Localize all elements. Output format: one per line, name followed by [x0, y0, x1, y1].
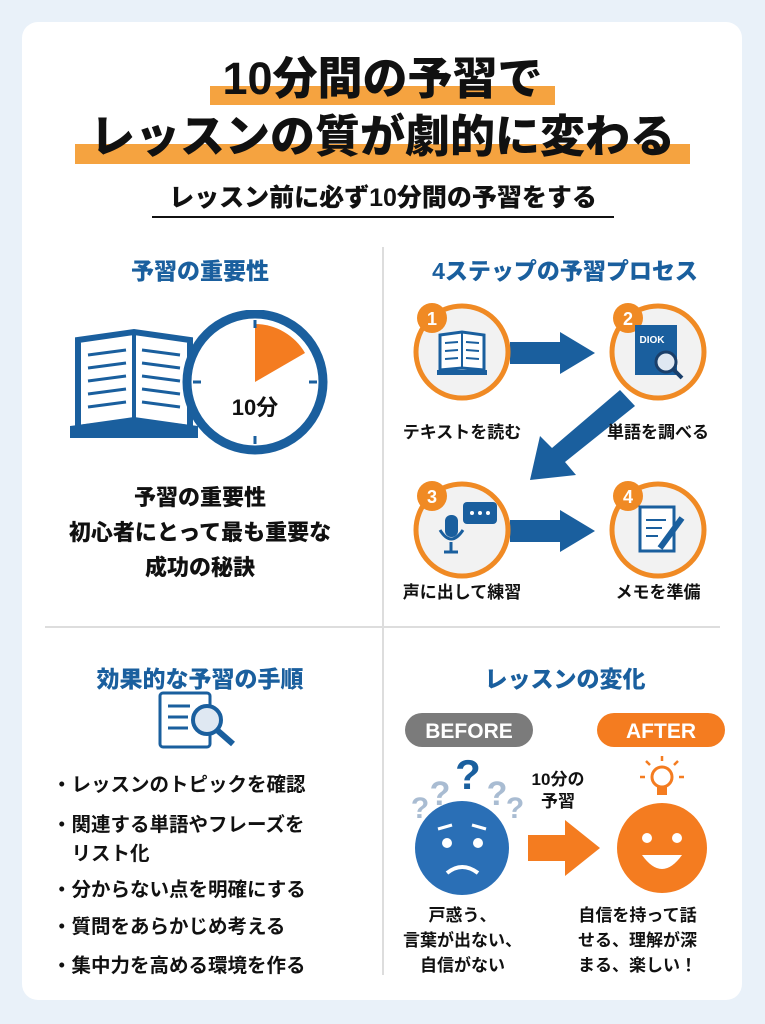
before/after diagram [405, 713, 725, 895]
step labels: メモを準備 [616, 583, 700, 602]
text: importance: 初心者にとって最も重要な [69, 520, 331, 545]
list: procedure: ・レッスンのトピックを確認 [52, 774, 306, 796]
steps diagram: 4 [623, 487, 633, 507]
steps diagram: 3 [427, 487, 437, 507]
before/after diagram: ? [487, 775, 507, 813]
before/after diagram: ? [506, 792, 524, 825]
heading: change: レッスンの変化 [484, 666, 646, 692]
step labels: 単語を調べる [607, 423, 709, 442]
text: after: まる、楽しい！ [578, 956, 697, 975]
text: before [403, 906, 522, 975]
text: importance [69, 485, 331, 580]
before/after diagram: 予習 [541, 792, 575, 811]
heading: 4 steps: 4ステップの予習プロセス [432, 258, 698, 284]
step labels: 声に出して練習 [403, 583, 521, 602]
text: after: せる、理解が深 [578, 931, 697, 950]
text: after: 自信を持って話 [578, 906, 697, 925]
text: before: 戸惑う、 [428, 906, 496, 925]
title: 10分間の予習で [222, 53, 543, 104]
list: procedure: ・集中力を高める環境を作る [52, 955, 306, 977]
steps diagram: 2 [623, 309, 633, 329]
steps diagram [414, 303, 706, 578]
list: procedure: ・質問をあらかじめ考える [52, 916, 285, 938]
icon: book and clock [70, 310, 328, 454]
list: procedure: ・分からない点を明確にする [52, 879, 306, 901]
text: after [578, 906, 697, 975]
before/after diagram: ? [430, 775, 450, 813]
icon: book and clock: 10分 [232, 395, 278, 420]
before/after diagram: 10分の [532, 770, 584, 789]
before/after diagram: AFTER [626, 720, 696, 743]
text: importance: 予習の重要性 [134, 485, 266, 510]
text: before: 言葉が出ない、 [403, 931, 522, 950]
list: procedure [52, 774, 306, 977]
before/after diagram: BEFORE [425, 720, 513, 743]
heading: importance: 予習の重要性 [131, 258, 269, 284]
steps diagram: DIOK [640, 335, 665, 346]
steps diagram: 1 [427, 309, 437, 329]
heading: procedure: 効果的な予習の手順 [96, 666, 304, 692]
text: before: 自信がない [420, 956, 505, 975]
list: procedure: ・関連する単語やフレーズを [52, 814, 305, 836]
before/after diagram: ? [411, 792, 429, 825]
icon: document magnifier [158, 692, 235, 748]
title [75, 53, 690, 164]
step labels [403, 423, 709, 602]
title: レッスンの質が劇的に変わる [90, 111, 675, 162]
before/after diagram: ? [455, 751, 481, 798]
step labels: テキストを読む [403, 423, 521, 442]
list: procedure: リスト化 [72, 843, 150, 865]
text: importance: 成功の秘訣 [145, 555, 255, 580]
subtitle: レッスン前に必ず10分間の予習をする [169, 184, 597, 212]
